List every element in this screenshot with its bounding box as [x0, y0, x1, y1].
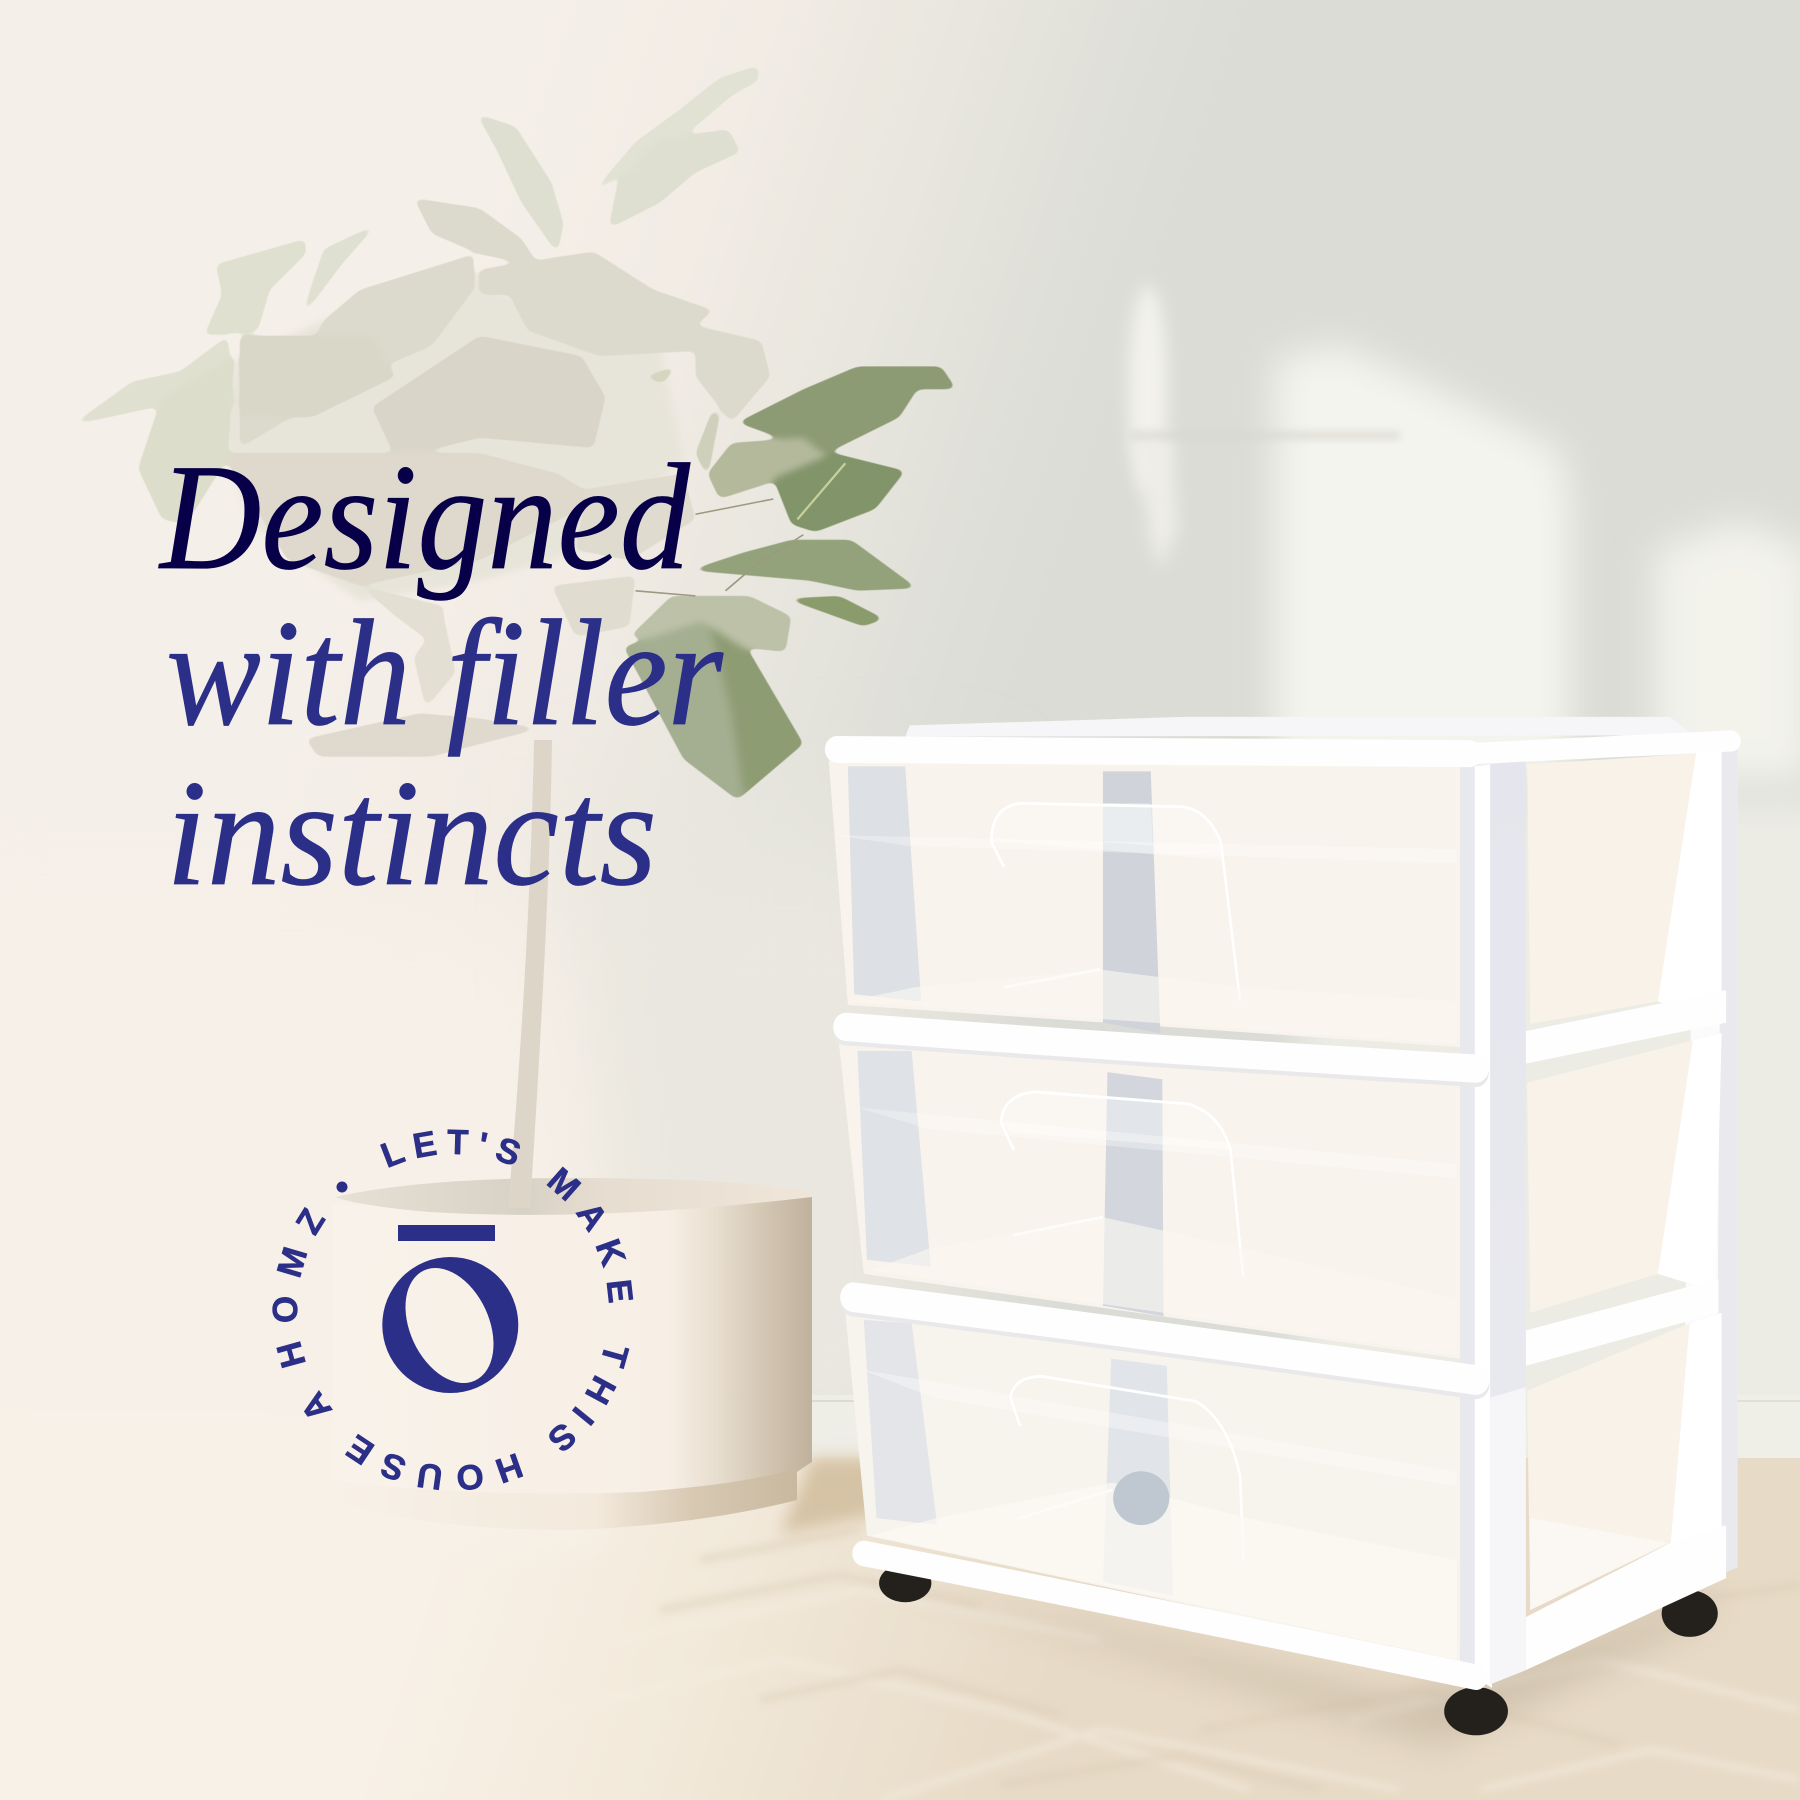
storage cart with three drawers: [829, 717, 1738, 1735]
drawer 2: [838, 1037, 1463, 1359]
drawer 1: [829, 761, 1467, 1047]
skirting board: [812, 1395, 1800, 1459]
cabinet floor shadow: [860, 1570, 1720, 1745]
green foreground leaves: [624, 366, 956, 800]
headline line 2: with filler: [166, 589, 724, 757]
side window middle: [1527, 1040, 1693, 1313]
circular slogan: THIS: [549, 1348, 630, 1451]
plant trunk: [508, 740, 552, 1208]
side rails: [1526, 990, 1726, 1670]
wall light patches: [1128, 285, 1800, 780]
circular slogan: [272, 1129, 634, 1490]
wooden floor: [0, 1400, 1800, 1800]
headline: [158, 433, 724, 917]
circular slogan: A: [304, 1390, 333, 1417]
badge dot: [336, 1182, 348, 1192]
circular slogan: LET'S: [380, 1129, 520, 1168]
logo macron bar: [398, 1225, 495, 1241]
top lid: [905, 717, 1693, 737]
faded plant canopy mass: [216, 285, 683, 601]
plant pot: [333, 1178, 812, 1530]
front right post: [1460, 761, 1526, 1688]
top rail: [837, 741, 1731, 754]
circular slogan: HOMZ: [272, 1206, 326, 1368]
circular slogan: HOUSE: [345, 1434, 524, 1490]
far side post: [1680, 740, 1738, 1589]
drawer rail 2: [854, 1297, 1476, 1384]
headline line 1: Designed: [158, 433, 691, 601]
drawer rail 1: [846, 1027, 1476, 1073]
badge: circular logo: [272, 1129, 634, 1490]
side window upper: [1527, 754, 1696, 1024]
circular slogan: MAKE: [546, 1166, 634, 1303]
leaf veins and stems: [636, 463, 845, 596]
side window lower: [1527, 1323, 1690, 1610]
drawer 3: [845, 1306, 1463, 1663]
side struts: [1658, 750, 1722, 1560]
headline line 3: instincts: [166, 749, 657, 917]
faded plant foliage: [72, 65, 770, 757]
wheels: [879, 1564, 1718, 1735]
bottom rail: [864, 1553, 1476, 1677]
logo letter o: [382, 1257, 518, 1393]
